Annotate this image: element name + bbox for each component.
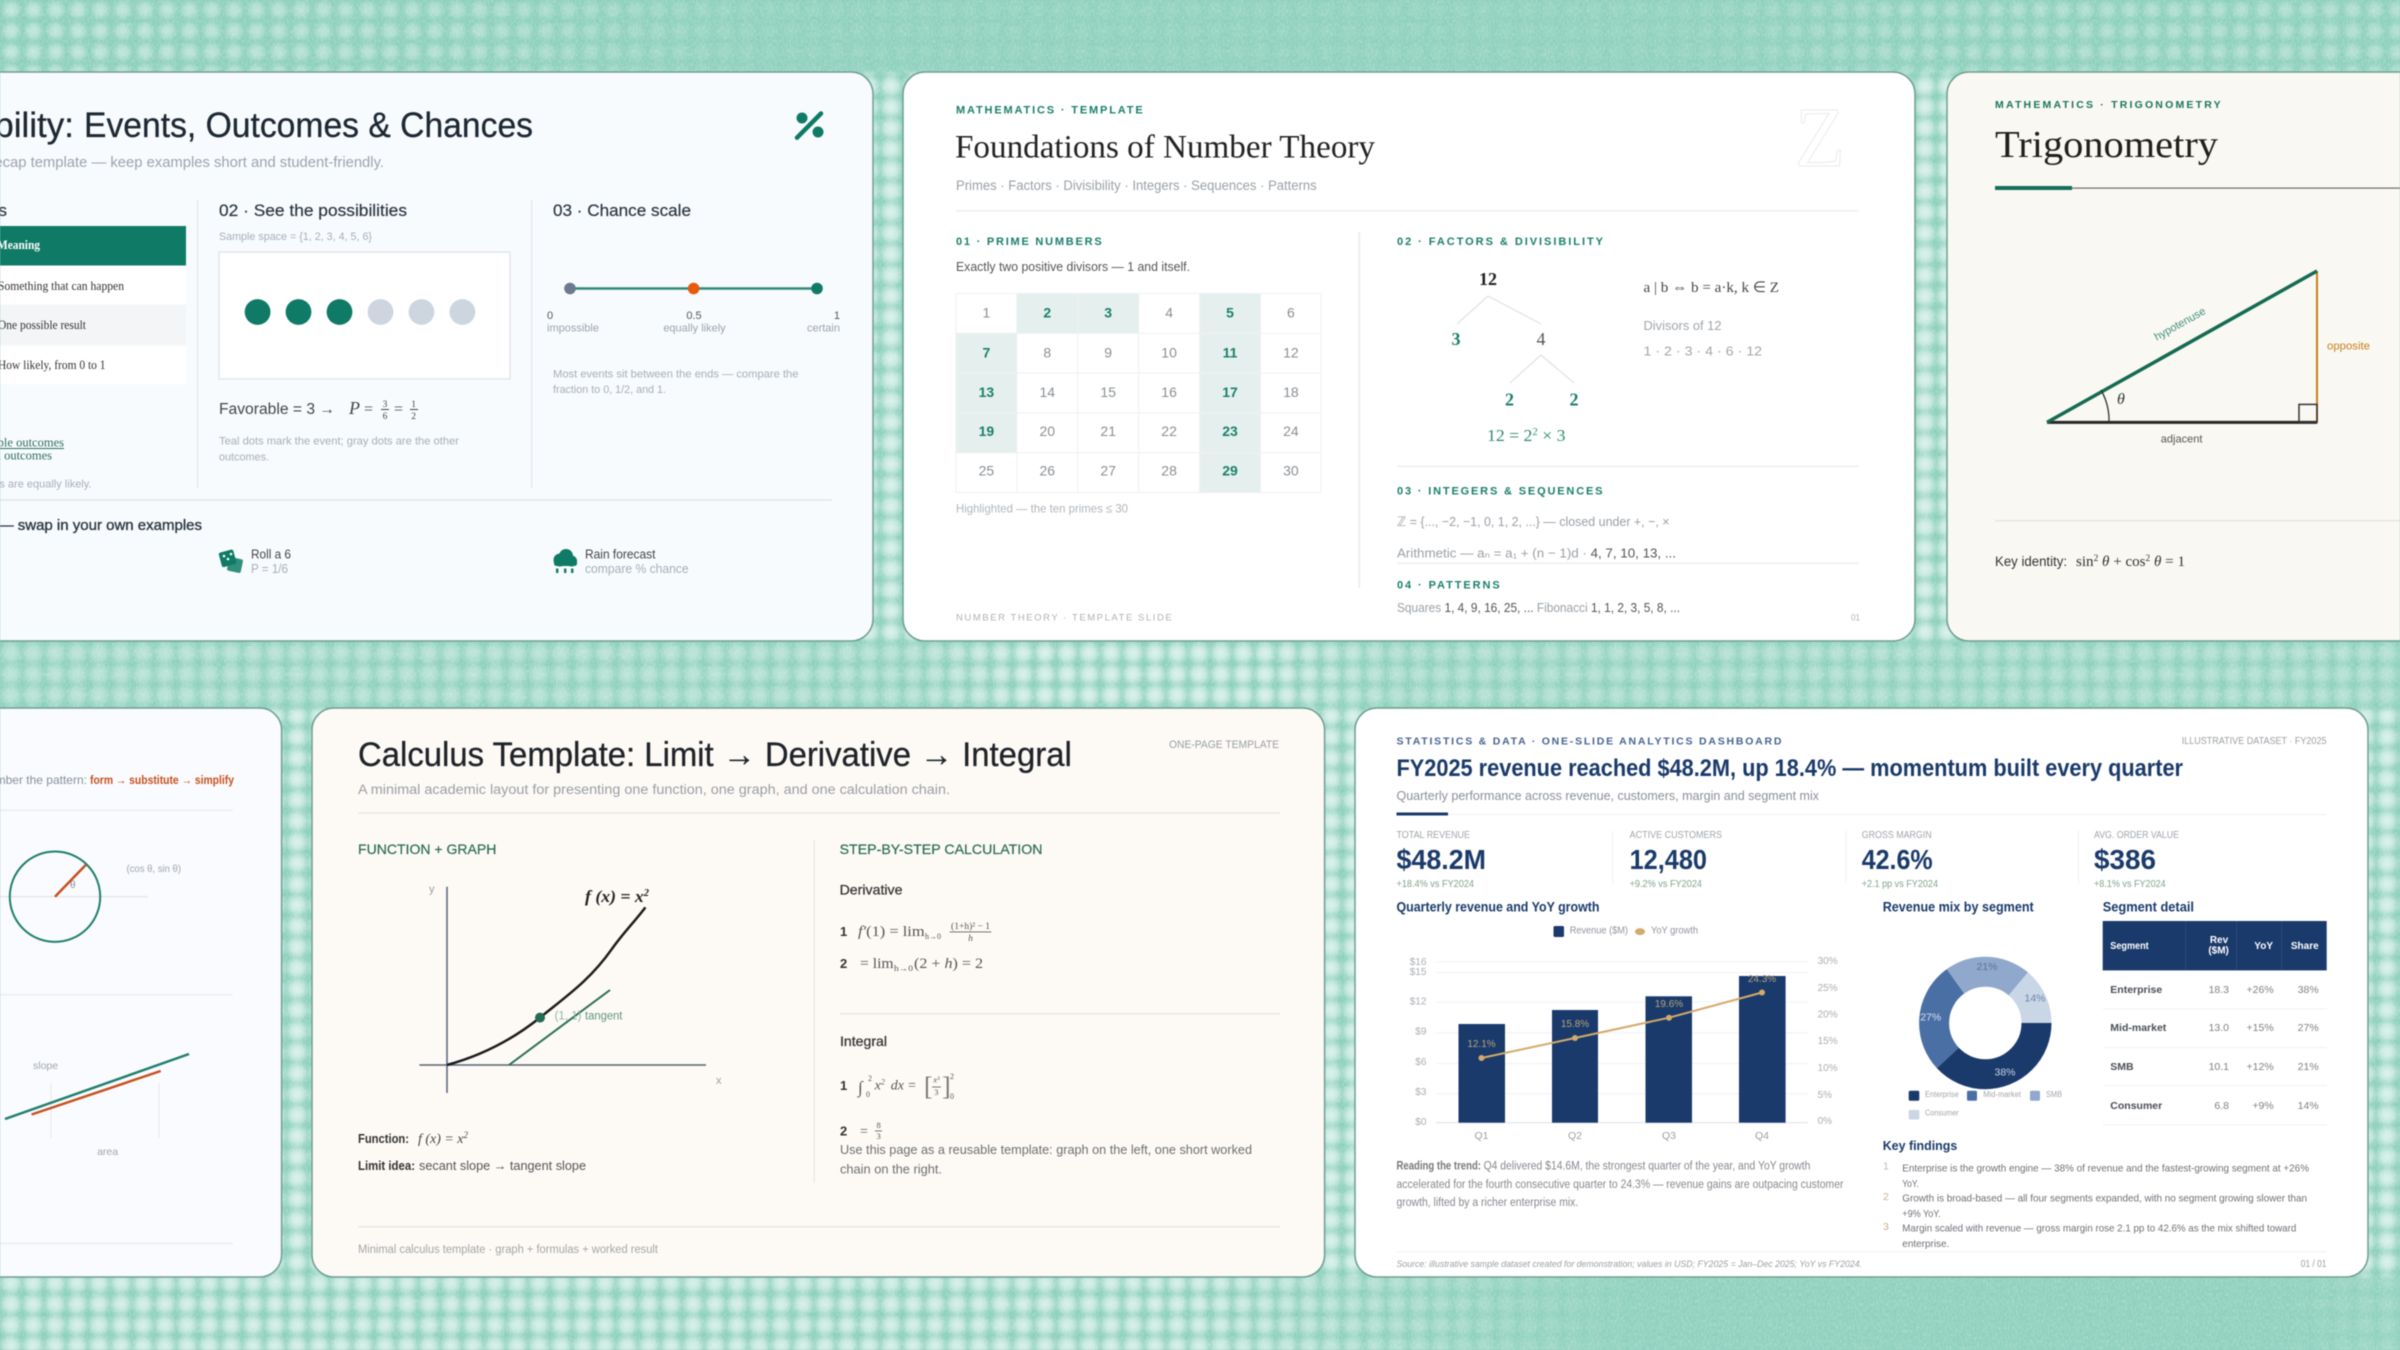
- chart: revenue mix donut: [1883, 900, 2062, 1120]
- kpi: active customers: +9.2% vs FY2024: [1630, 878, 1702, 890]
- icon: rain cloud: [554, 549, 577, 573]
- chart: prime grid: 22: [1161, 423, 1177, 439]
- chart: parabola with tangent: x: [716, 1075, 722, 1087]
- formula: key identity: [1995, 553, 2185, 570]
- formula: key identity: θ: [2150, 554, 2161, 570]
- chart: prime grid: 23: [1222, 423, 1238, 439]
- table: segment detail: 38%: [2298, 984, 2319, 996]
- diagram: factor tree: 12: [1479, 269, 1497, 289]
- text: function definition: [358, 1130, 468, 1147]
- formula: key identity: = 1: [2165, 554, 2184, 570]
- formula: favorable: =: [394, 401, 403, 418]
- section 01: key terms table: One possible result: [0, 318, 86, 332]
- section 03: chance scale: 03 · Chance scale: [553, 201, 691, 220]
- section 03: integers and sequences: 03 · INTEGERS & SEQUENCES: [1397, 485, 1602, 497]
- kpi: gross margin: GROSS MARGIN: [1862, 830, 1932, 841]
- block: integral: 8: [876, 1120, 881, 1130]
- caption: dots explanation: outcomes.: [219, 452, 269, 464]
- text: function definition: Function:: [358, 1131, 409, 1146]
- chart: revenue mix donut: Revenue mix by segment: [1883, 900, 2034, 915]
- table: segment detail: 10.1: [2209, 1061, 2229, 1073]
- formula: divisibility: a | b ⇔ b = a·k, k ∈ Z: [1644, 280, 1779, 296]
- panel: precalculus slide (cropped): [0, 708, 282, 1277]
- example: rain forecast: Rain forecast: [585, 548, 656, 562]
- formula: key identity: 2: [2094, 553, 2098, 563]
- example: roll a 6: Roll a 6: [251, 548, 291, 562]
- labels: quarters: Q1: [1474, 1130, 1489, 1142]
- block: integral: 0: [866, 1090, 870, 1099]
- note: reusable template: Use this page as a reusable template: graph on the left, one short worked: [840, 1143, 1252, 1157]
- kpi: total revenue: $48.2M: [1396, 844, 1486, 875]
- section 03: integers and sequences: ℤ = {..., −2, −1, 0, 1, 2, ...} — closed under +, −, ×: [1397, 514, 1670, 529]
- chart: probability number line: certain: [807, 323, 840, 335]
- table: segment detail: 13.0: [2209, 1022, 2229, 1034]
- footer: calculus: Minimal calculus template · graph + formulas + worked result: [358, 1244, 659, 1256]
- example: roll a 6: [251, 548, 291, 576]
- text: function definition: 2: [464, 1130, 468, 1140]
- diagram: right triangle: hypotenuse: [2152, 305, 2208, 343]
- diagram: unit circle: (cos θ, sin θ): [126, 863, 181, 875]
- note: reusable template: [840, 1143, 1252, 1176]
- list: key findings: 2: [1883, 1191, 1889, 1203]
- chart: parabola with tangent: y: [429, 884, 435, 896]
- chart: revenue mix donut: 27%: [1920, 1011, 1941, 1023]
- block: integral: ∫: [857, 1078, 864, 1098]
- list: key findings: Margin scaled with revenue — gross margin rose 2.1 pp to 42.6% as the mix shifted toward: [1902, 1222, 2296, 1234]
- footer: page number: 01 / 01: [2301, 1259, 2327, 1270]
- table: segment detail: YoY: [2254, 941, 2273, 952]
- axis: revenue: [1410, 957, 1427, 1128]
- chart: prime grid: [956, 294, 1321, 492]
- table: segment detail: +26%: [2247, 984, 2274, 996]
- example: roll a 6: P = 1/6: [251, 562, 288, 576]
- table: segment detail: [2103, 900, 2327, 1125]
- chart: prime grid: 30: [1283, 462, 1299, 478]
- axis: revenue: $6: [1415, 1057, 1427, 1068]
- table: segment detail: +15%: [2247, 1022, 2274, 1034]
- chart: prime grid: 19: [979, 423, 994, 439]
- chart: probability number line: [547, 283, 840, 335]
- block: integral: 3: [876, 1131, 881, 1141]
- chart: prime grid: 25: [979, 462, 994, 478]
- panel: number theory slide: [903, 72, 1915, 641]
- axis: growth: 25%: [1818, 983, 1838, 994]
- column: step-by-step calculation: [840, 841, 1280, 1176]
- table: segment detail: Segment detail: [2103, 900, 2194, 915]
- block: integral: ]: [942, 1072, 951, 1101]
- footer: number theory: [956, 613, 1860, 624]
- chart: probability number line: 1: [834, 310, 840, 322]
- list: key findings: Key findings: [1883, 1138, 1957, 1153]
- block: integral: x: [875, 1079, 881, 1094]
- footer: number theory: 01: [1851, 613, 1860, 624]
- kpi: average order value: AVG. ORDER VALUE: [2094, 830, 2179, 841]
- diagram: right triangle: θ: [2117, 391, 2125, 408]
- chart: probability number line: 0.5: [686, 310, 702, 322]
- chart: quarterly revenue and yoy growth: [1396, 900, 1838, 1142]
- footer: source note: Source: illustrative sample dataset created for demonstration; values in USD; FY2025 = Jan–Dec 2025; YoY vs FY2024.: [1396, 1259, 1862, 1270]
- kpi: active customers: [1630, 830, 1722, 890]
- caption: between the ends: fraction to 0, 1/2, and 1.: [553, 384, 666, 396]
- list: key findings: Growth is broad-based — all four segments expanded, with no segment growing slower than: [1902, 1193, 2307, 1205]
- table: segment detail: Enterprise: [2110, 984, 2162, 996]
- caption: dots explanation: Teal dots mark the event; gray dots are the other: [219, 436, 459, 448]
- labels: quarters: Q4: [1755, 1130, 1769, 1142]
- section 03: chance scale: [547, 201, 840, 396]
- axis: growth: 0%: [1818, 1116, 1832, 1127]
- diagram: factor tree: 2: [1570, 390, 1578, 410]
- text block: reading the trend: accelerated for the fourth consecutive quarter to 24.3% — revenue gains are outpacing customer: [1396, 1179, 1844, 1191]
- block: integral: 2: [868, 1074, 872, 1083]
- kpi: total revenue: [1396, 830, 1486, 890]
- line: yoy growth: [1478, 990, 1765, 1061]
- kpi: average order value: +8.1% vs FY2024: [2094, 878, 2166, 890]
- list: key findings: enterprise.: [1902, 1238, 1949, 1250]
- block: integral: Integral: [840, 1033, 887, 1049]
- section 01: prime numbers: 01 · PRIME NUMBERS: [956, 236, 1102, 248]
- diagram: factor tree: 4: [1536, 329, 1546, 349]
- diagram: slope and area: area: [97, 1146, 118, 1158]
- caption: between the ends: Most events sit between the ends — compare the: [553, 369, 798, 381]
- chart: outcome dots: [219, 252, 510, 379]
- table: segment detail: 18.3: [2209, 984, 2229, 996]
- formula: key identity: 2: [2146, 553, 2150, 563]
- text block: reading the trend: Reading the trend:: [1396, 1161, 1481, 1173]
- chart: prime grid: 1: [983, 304, 991, 320]
- legend: segments: Mid-market: [1983, 1090, 2022, 1099]
- block: integral: [: [924, 1072, 933, 1101]
- labels: yoy values: 24.3%: [1748, 974, 1776, 985]
- icon: dice: [218, 549, 243, 573]
- text block: reading the trend: [1396, 1161, 1844, 1209]
- diagram: factor tree: × 3: [1538, 426, 1566, 445]
- block: derivative: (1+h)² − 1: [951, 921, 990, 932]
- block: derivative: 2: [840, 956, 847, 971]
- block: derivative: f′(1) = lim: [858, 924, 925, 940]
- chart: revenue mix donut: 21%: [1976, 961, 1998, 973]
- note: remember the pattern: form → substitute → simplify: [90, 773, 234, 787]
- table: segment detail: 14%: [2298, 1100, 2319, 1112]
- axis: growth: 15%: [1818, 1036, 1838, 1047]
- note: remember the pattern: [0, 773, 234, 787]
- block: integral: 0: [950, 1092, 954, 1101]
- chart: prime grid: 2: [1043, 304, 1051, 320]
- table: segment detail: 21%: [2298, 1061, 2319, 1073]
- table: segment detail: Mid-market: [2110, 1022, 2167, 1034]
- axis: revenue: $9: [1415, 1026, 1427, 1038]
- chart: parabola with tangent: 2: [643, 888, 649, 899]
- block: derivative: h: [968, 934, 973, 944]
- formula: favorable: [219, 398, 418, 422]
- section 02: see the possibilities: Sample space = {1, 2, 3, 4, 5, 6}: [219, 231, 372, 243]
- formula: favorable: 3: [383, 400, 388, 410]
- block: integral: =: [908, 1079, 916, 1094]
- list: key findings: YoY.: [1902, 1178, 1919, 1190]
- text: limit idea: Limit idea:: [358, 1158, 415, 1173]
- title: probability: Events, Outcomes & Chances: [84, 106, 533, 145]
- chart: prime grid: 15: [1100, 384, 1116, 400]
- section 04: patterns: [1397, 580, 1680, 615]
- section 01: prime numbers: [956, 236, 1321, 516]
- formula: key identity: Key identity:: [1995, 554, 2067, 569]
- diagram: right triangle: [2047, 271, 2370, 446]
- table: segment detail: Share: [2291, 941, 2319, 952]
- column: function and graph: FUNCTION + GRAPH: [358, 841, 496, 857]
- example: rain forecast: [585, 548, 689, 576]
- chart: prime grid: 12: [1283, 344, 1299, 360]
- kpi: gross margin: +2.1 pp vs FY2024: [1862, 878, 1938, 890]
- table: segment detail: ($M): [2208, 946, 2229, 956]
- formula: favorable: =: [364, 401, 373, 418]
- chart: prime grid: 16: [1161, 384, 1177, 400]
- section 02: see the possibilities: [219, 201, 510, 464]
- axis: revenue: $3: [1415, 1087, 1427, 1098]
- diagram: factor tree: 3: [1452, 329, 1460, 349]
- legend: segments: [1909, 1090, 2062, 1120]
- kpi: gross margin: [1862, 830, 1938, 890]
- chart: prime grid: 9: [1104, 344, 1112, 360]
- panel: analytics dashboard slide: [1355, 708, 2368, 1277]
- chart: prime grid: 28: [1161, 462, 1177, 478]
- block: integral: 2: [881, 1078, 885, 1087]
- section 02: factors and divisibility: 02 · FACTORS & DIVISIBILITY: [1397, 236, 1604, 248]
- subtitle: calculus: A minimal academic layout for presenting one function, one graph, and one calculation chain.: [358, 782, 950, 797]
- chart: prime grid: 7: [983, 344, 991, 360]
- chart: prime grid: 6: [1287, 304, 1295, 320]
- diagram: factor tree: 12 = 2: [1487, 426, 1529, 445]
- block: integral: 2: [950, 1072, 954, 1081]
- block: integral: x³: [932, 1075, 940, 1085]
- diagram: factor tree: [1452, 269, 1578, 445]
- chart: prime grid: 11: [1223, 344, 1238, 360]
- labels: quarters: [1474, 1130, 1769, 1142]
- axis: growth: 20%: [1818, 1009, 1838, 1020]
- kpi: active customers: 12,480: [1630, 844, 1707, 875]
- section 02: factors and divisibility: [1397, 236, 1779, 445]
- chart: prime grid: 27: [1100, 462, 1116, 478]
- diagram: factor tree: 2: [1505, 390, 1514, 410]
- axis: revenue: $15: [1410, 967, 1427, 978]
- text: limit idea: secant slope → tangent slope: [419, 1158, 586, 1173]
- title: number theory: Foundations of Number Theory: [955, 130, 1375, 166]
- chart: prime grid: 3: [1104, 304, 1112, 320]
- formula: favorable: P: [348, 398, 360, 418]
- tag: one-page template: ONE-PAGE TEMPLATE: [1169, 739, 1279, 751]
- list: key findings: Enterprise is the growth engine — 38% of revenue and the fastest-growing segment at +26%: [1902, 1163, 2309, 1175]
- section 02: see the possibilities: 02 · See the possibilities: [219, 201, 407, 220]
- axis: growth: 5%: [1818, 1090, 1832, 1101]
- chart: prime grid: 17: [1222, 384, 1238, 400]
- chart: parabola with tangent: (1, 1): [555, 1011, 582, 1023]
- formula: key identity: + cos: [2113, 554, 2144, 570]
- labels: yoy values: 15.8%: [1561, 1019, 1589, 1030]
- legend: segments: Consumer: [1925, 1109, 1959, 1118]
- chart: parabola with tangent: tangent: [585, 1011, 623, 1023]
- text block: reading the trend: Q4 delivered $14.6M, the strongest quarter of the year, and YoY growth: [1484, 1161, 1810, 1173]
- panel: calculus slide: [312, 708, 1325, 1277]
- chart: prime grid: 18: [1283, 384, 1299, 400]
- block: integral: 1: [840, 1078, 847, 1093]
- labels: yoy values: [1467, 974, 1776, 1050]
- section 04: patterns: 04 · PATTERNS: [1397, 580, 1500, 592]
- table: segment detail: Consumer: [2110, 1100, 2162, 1112]
- labels: quarters: Q2: [1568, 1130, 1582, 1142]
- kpi: gross margin: 42.6%: [1862, 844, 1933, 875]
- block: derivative: 1: [840, 924, 847, 939]
- block: derivative: = lim: [860, 956, 894, 972]
- block: integral: 2: [840, 1124, 847, 1138]
- list: key findings: 3: [1883, 1221, 1889, 1233]
- axis: growth: 10%: [1818, 1063, 1838, 1074]
- chart: probability number line: 0: [547, 310, 553, 322]
- chart: prime grid: 21: [1100, 423, 1116, 439]
- axis: growth: [1818, 956, 1838, 1127]
- chart: probability number line: impossible: [547, 323, 599, 335]
- chart: parabola with tangent: [419, 884, 722, 1093]
- block: derivative: h→0: [894, 964, 913, 973]
- text block: divisors of 12: 1 · 2 · 3 · 4 · 6 · 12: [1644, 344, 1762, 358]
- example: rain forecast: compare % chance: [585, 562, 689, 576]
- list: key findings: 1: [1883, 1161, 1889, 1173]
- footer: number theory: NUMBER THEORY · TEMPLATE SLIDE: [956, 613, 1172, 624]
- text block: divisors of 12: Divisors of 12: [1644, 318, 1722, 333]
- kpi: total revenue: +18.4% vs FY2024: [1396, 878, 1474, 890]
- eyebrow: statistics and data: STATISTICS & DATA · ONE-SLIDE ANALYTICS DASHBOARD: [1396, 736, 1782, 748]
- block: integral: dx: [891, 1079, 905, 1094]
- caption: between the ends: [553, 369, 798, 396]
- chart: quarterly revenue and yoy growth: Quarterly revenue and YoY growth: [1396, 900, 1600, 915]
- diagram: right triangle: adjacent: [2161, 434, 2202, 446]
- chart: prime grid: 13: [979, 384, 994, 400]
- labels: yoy values: 19.6%: [1655, 999, 1683, 1010]
- table: segment detail: Segment: [2110, 941, 2149, 952]
- block: derivative: Derivative: [840, 881, 903, 897]
- legend: segments: Enterprise: [1925, 1090, 1959, 1099]
- table: segment detail: +12%: [2247, 1061, 2274, 1073]
- subtitle: topics: Primes · Factors · Divisibility · Integers · Sequences · Patterns: [956, 178, 1317, 193]
- formula: favorable: Favorable = 3 →: [219, 401, 335, 418]
- chart: prime grid: 5: [1226, 304, 1234, 320]
- axis: revenue: $12: [1410, 996, 1427, 1008]
- section 01: prime numbers: Highlighted — the ten primes ≤ 30: [956, 502, 1128, 516]
- diagram: slope and area: slope: [33, 1060, 58, 1072]
- chart: parabola with tangent: f (x) = x: [585, 887, 641, 906]
- diagram: unit circle: θ: [70, 880, 76, 891]
- labels: yoy values: 12.1%: [1467, 1039, 1496, 1050]
- chart: prime grid: 24: [1283, 423, 1299, 439]
- table: segment detail: Rev: [2210, 935, 2229, 946]
- panel: trigonometry slide: [1947, 72, 2400, 641]
- axis: revenue: $16: [1410, 957, 1427, 968]
- subtitle: quarterly performance: Quarterly performance across revenue, customers, margin and segment mix: [1396, 788, 1819, 803]
- chart: probability number line: equally likely: [663, 323, 726, 335]
- kpi: total revenue: TOTAL REVENUE: [1396, 830, 1470, 841]
- chart: prime grid: 20: [1040, 423, 1055, 439]
- tag: illustrative dataset: ILLUSTRATIVE DATASET · FY2025: [2182, 736, 2327, 747]
- eyebrow: mathematics template: MATHEMATICS · TEMPLATE: [956, 105, 1143, 117]
- title: trigonometry: Trigonometry: [1995, 124, 2218, 166]
- chart: prime grid: 14: [1040, 384, 1055, 400]
- section 03: integers and sequences: Arithmetic — aₙ = a₁ + (n − 1)d · 4, 7, 10, 13, ...: [1397, 546, 1676, 560]
- chart: prime grid: 8: [1043, 344, 1051, 360]
- formula: favorable: 2: [411, 412, 416, 422]
- section 01: key terms table: [0, 201, 186, 490]
- diagram: slope and area: [5, 1054, 189, 1158]
- section 01: prime numbers: Exactly two positive divisors — 1 and itself.: [956, 259, 1190, 274]
- legend: revenue and growth: YoY growth: [1651, 926, 1698, 936]
- caption: dots explanation: [219, 436, 459, 464]
- kpi: average order value: [2094, 830, 2179, 890]
- watermark: Z: Z: [1795, 89, 1845, 185]
- block: integral: 3: [934, 1087, 939, 1097]
- kpi: active customers: ACTIVE CUSTOMERS: [1630, 830, 1722, 841]
- chart: prime grid: 4: [1165, 304, 1173, 320]
- list: key findings: [1883, 1138, 2309, 1250]
- title: revenue headline: FY2025 revenue reached $48.2M, up 18.4% — momentum built every quarter: [1396, 755, 2183, 782]
- text: function definition: f (x) = x: [418, 1132, 464, 1147]
- diagram: factor tree: 2: [1532, 427, 1538, 438]
- diagram: unit circle: [0, 852, 181, 942]
- labels: quarters: Q3: [1662, 1130, 1676, 1142]
- block: derivative: (2 + h) = 2: [914, 956, 983, 972]
- legend: segments: SMB: [2046, 1090, 2062, 1099]
- axis: revenue: $0: [1415, 1117, 1427, 1128]
- list: key findings: +9% YoY.: [1902, 1208, 1941, 1220]
- formula: key identity: sin: [2076, 554, 2093, 570]
- table: segment detail: SMB: [2110, 1061, 2134, 1073]
- section 01: key terms table: Something that can happen: [0, 279, 125, 293]
- chart: prime grid: 26: [1040, 462, 1055, 478]
- chart: revenue mix donut: 38%: [1994, 1067, 2016, 1079]
- bars: quarterly revenue: [1458, 976, 1786, 1123]
- legend: revenue and growth: Revenue ($M): [1570, 926, 1628, 936]
- block: integral: [840, 1033, 954, 1141]
- block: derivative: h→0: [925, 932, 941, 941]
- chart: prime grid: 10: [1161, 344, 1177, 360]
- column: step-by-step calculation: STEP-BY-STEP CALCULATION: [840, 841, 1042, 857]
- panel: probability slide: [0, 72, 873, 641]
- chart: revenue mix donut: 14%: [2024, 993, 2046, 1005]
- note: reusable template: chain on the right.: [840, 1162, 942, 1176]
- column: function and graph: [358, 841, 722, 1173]
- icon: percent: [796, 112, 824, 138]
- section 01: key terms table: How likely, from 0 to 1: [0, 358, 106, 372]
- text block: reading the trend: growth, lifted by a richer enterprise mix.: [1396, 1197, 1578, 1209]
- section 03: integers and sequences: [1397, 485, 1676, 560]
- table: segment detail: 27%: [2298, 1022, 2319, 1034]
- eyebrow: mathematics trigonometry: MATHEMATICS · TRIGONOMETRY: [1995, 99, 2221, 111]
- diagram: right triangle: opposite: [2327, 341, 2370, 353]
- legend: revenue and growth: [1554, 926, 1698, 937]
- formula: favorable: 1: [411, 400, 416, 410]
- chart: prime grid: 29: [1222, 462, 1238, 478]
- table: segment detail: +9%: [2252, 1100, 2274, 1112]
- formula: favorable: 6: [383, 412, 388, 422]
- title: calculus: Calculus Template: Limit → Derivative → Integral: [358, 736, 1072, 774]
- formula: key identity: θ: [2098, 554, 2109, 570]
- kpi: average order value: $386: [2094, 844, 2156, 875]
- block: integral: =: [860, 1124, 868, 1140]
- text block: divisors of 12: [1644, 318, 1762, 358]
- axis: growth: 30%: [1818, 956, 1838, 967]
- section 04: patterns: Squares 1, 4, 9, 16, 25, ... Fibonacci 1, 1, 2, 3, 5, 8, ...: [1397, 601, 1680, 615]
- block: derivative: [840, 881, 991, 973]
- table: segment detail: 6.8: [2214, 1100, 2229, 1112]
